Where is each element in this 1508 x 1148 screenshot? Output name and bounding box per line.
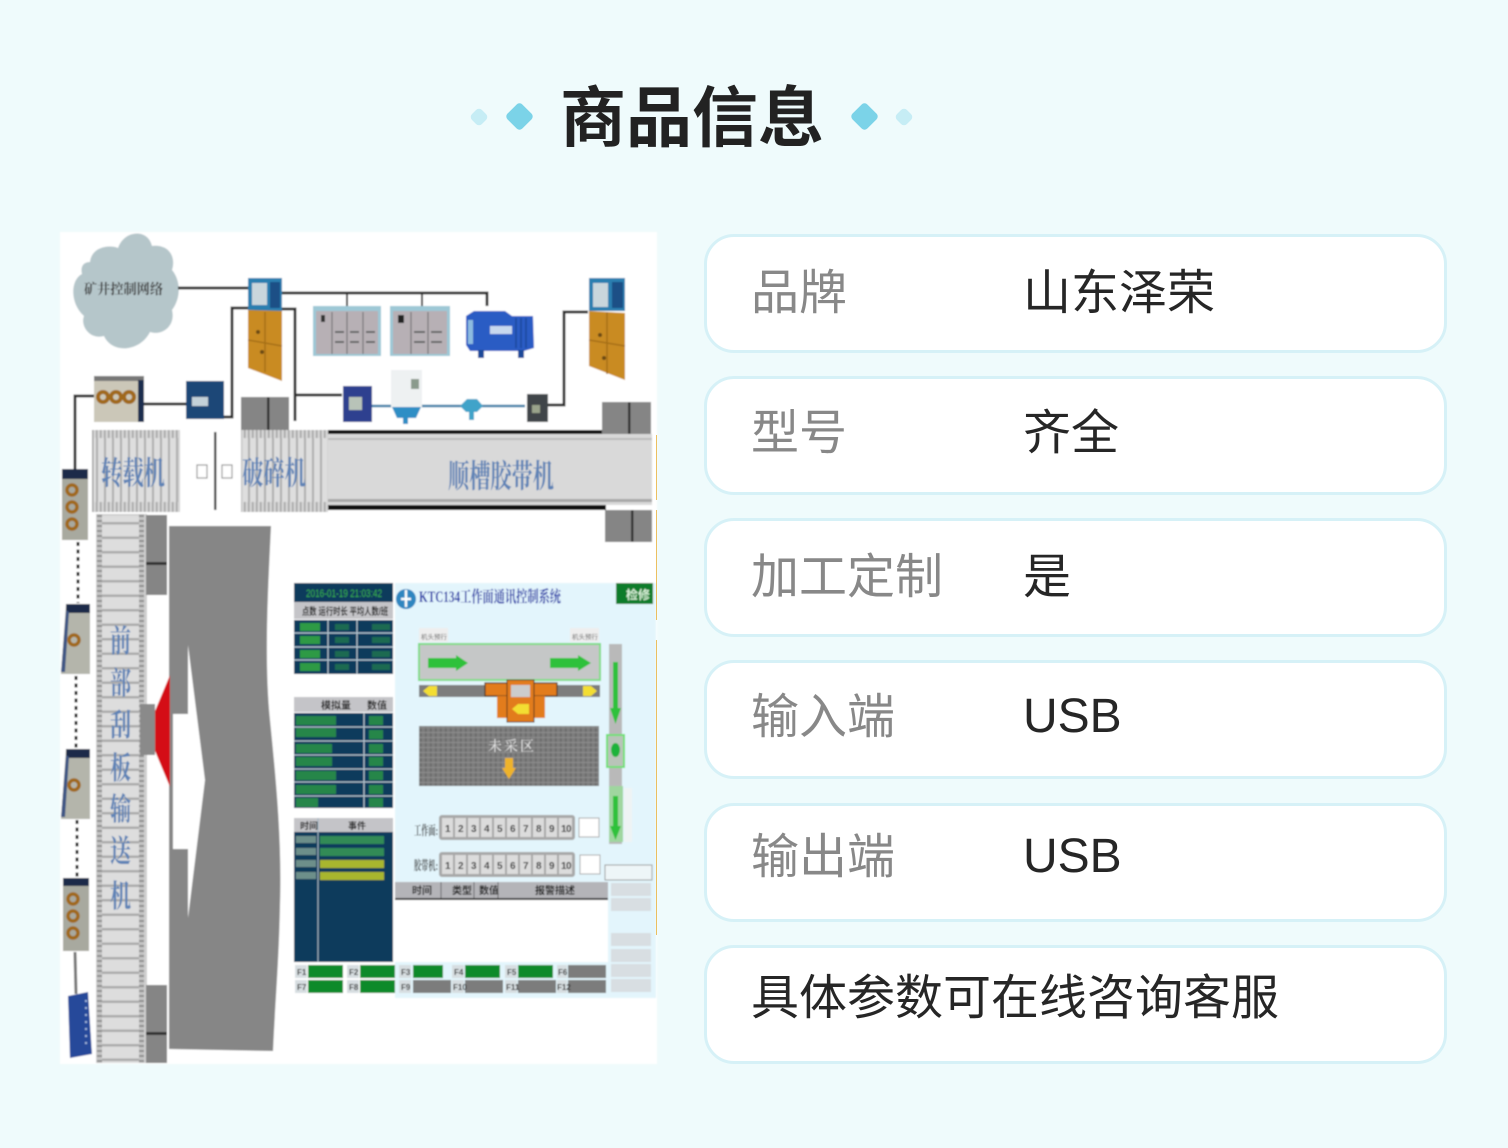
HMI conveyor graphic: 机头预行 <box>572 632 598 641</box>
gray boxes right <box>602 402 651 435</box>
blue link line <box>372 405 525 407</box>
HMI function keys: F4 <box>454 968 464 977</box>
navy sensor <box>343 386 372 422</box>
label: 品牌 <box>751 267 847 320</box>
transfer conveyor section <box>92 430 180 512</box>
HMI alarm table: 报警描述 <box>535 884 575 897</box>
HMI data table: 数值 <box>367 699 387 712</box>
HMI function keys: F3 <box>401 968 411 977</box>
network cables <box>75 288 588 470</box>
HMI status table: 2016-01-19 21:03:42 <box>306 588 382 600</box>
value: 山东泽荣 <box>1023 267 1215 320</box>
HMI conveyor graphic <box>419 628 600 697</box>
dotted links <box>76 542 78 878</box>
label: 型号 <box>751 407 847 460</box>
image background <box>60 232 657 1064</box>
crusher section <box>241 430 328 512</box>
label: 加工定制 <box>751 551 943 604</box>
HMI logo <box>396 589 416 609</box>
note text: 具体参数可在线咨询客服 <box>751 972 1279 1025</box>
switchgear panel 1 <box>313 306 381 356</box>
inline coupler <box>460 399 483 420</box>
HMI function keys <box>295 965 606 993</box>
crusher section: 破碎机 <box>242 455 306 491</box>
title: 商品信息 <box>560 81 824 155</box>
HMI mode badge <box>616 583 653 604</box>
belt conveyor section: 顺槽胶带机 <box>448 458 554 494</box>
value: 齐全 <box>1023 407 1119 460</box>
white sensor <box>391 370 422 424</box>
HMI belt number row: 12345678910 <box>445 861 572 872</box>
orange image edge <box>656 435 658 935</box>
HMI shearer graphic <box>485 680 557 722</box>
HMI working-face number row: 12345678910 <box>445 824 572 835</box>
HMI working-face number row: 工作面: <box>414 823 438 838</box>
HMI status table <box>294 583 393 674</box>
shearer shape <box>169 526 280 1051</box>
HMI panel background <box>395 583 656 998</box>
HMI function keys: F2 <box>349 968 359 977</box>
spec row: output <box>704 803 1447 922</box>
HMI function keys: F12 <box>557 983 571 992</box>
HMI function keys: F1 <box>297 968 307 977</box>
decoration: right small diamond <box>894 107 914 127</box>
HMI belt number row <box>414 852 600 877</box>
HMI alarm table: 数值 <box>479 884 499 897</box>
transfer conveyor section: 转载机 <box>101 455 165 491</box>
scraper conveyor: 前 <box>110 624 131 659</box>
cloud: mine control network <box>73 233 179 348</box>
HMI data table <box>294 697 393 808</box>
spec row: input <box>704 660 1447 779</box>
cloud: mine control network: 矿井控制网络 <box>84 281 163 298</box>
scraper conveyor: 机 <box>110 879 131 914</box>
value: 是 <box>1023 551 1071 604</box>
HMI function keys: F10 <box>453 983 467 992</box>
scraper conveyor: 部 <box>110 666 131 701</box>
label: 输出端 <box>751 831 895 884</box>
gray boxes top <box>241 397 289 430</box>
scraper conveyor: 板 <box>110 751 131 786</box>
decoration: left large diamond <box>505 102 534 131</box>
scraper conveyor: 刮 <box>110 708 131 743</box>
HMI event table <box>294 818 393 962</box>
HMI heading: KTC134工作面通讯控制系统 <box>419 587 562 606</box>
value: USB <box>1023 690 1122 743</box>
blue transformer <box>466 311 534 358</box>
label: 输入端 <box>751 691 895 744</box>
switchgear panel 2 <box>390 306 450 356</box>
HMI function keys: F5 <box>507 968 517 977</box>
HMI goaf area: 未采区 <box>488 738 536 755</box>
HMI function keys: F8 <box>349 983 359 992</box>
HMI alarm table: 类型 <box>452 884 472 897</box>
gray boxes scraper bottom <box>146 985 167 1063</box>
HMI event table: 时间 <box>300 820 318 831</box>
spec row: customization <box>704 518 1447 637</box>
HMI working-face number row <box>414 815 599 840</box>
HMI vertical conveyor <box>607 644 632 844</box>
spec row: brand <box>704 234 1447 353</box>
HMI status table: 点数 运行时长 平均人数/班 <box>302 605 388 618</box>
field units column <box>61 469 92 1058</box>
scraper conveyor: 送 <box>110 834 131 869</box>
HMI alarm table <box>395 882 608 962</box>
HMI function keys: F9 <box>401 983 411 992</box>
scraper conveyor <box>96 514 147 1063</box>
note row <box>704 945 1447 1064</box>
navy box <box>186 381 224 419</box>
spec row: model <box>704 376 1447 495</box>
HMI conveyor graphic: 机头预行 <box>421 632 448 641</box>
HMI mode badge: 检修 <box>626 587 650 602</box>
HMI belt number row: 胶带机: <box>414 858 438 873</box>
HMI side buttons <box>605 865 652 992</box>
HMI event table: 事件 <box>348 820 366 831</box>
control station right <box>589 278 625 380</box>
HMI function keys: F7 <box>297 983 307 992</box>
control station left <box>248 278 282 381</box>
beige junction box <box>94 376 144 422</box>
HMI alarm table: 时间 <box>412 884 432 897</box>
value: USB <box>1023 830 1122 883</box>
belt conveyor section <box>328 430 652 510</box>
gray boxes lower right <box>605 510 652 542</box>
white gap with squares <box>180 430 241 512</box>
HMI data table: 模拟量 <box>321 699 351 712</box>
HMI function keys: F6 <box>558 968 568 977</box>
red cutter <box>155 675 170 787</box>
gray sensor <box>527 394 548 422</box>
gray cutter base <box>140 704 155 755</box>
HMI goaf area <box>419 726 599 786</box>
HMI function keys: F11 <box>506 983 520 992</box>
decoration: right large diamond <box>850 102 879 131</box>
decoration: left small diamond <box>469 107 489 127</box>
gray boxes scraper top <box>146 515 167 595</box>
scraper conveyor: 输 <box>110 792 131 827</box>
